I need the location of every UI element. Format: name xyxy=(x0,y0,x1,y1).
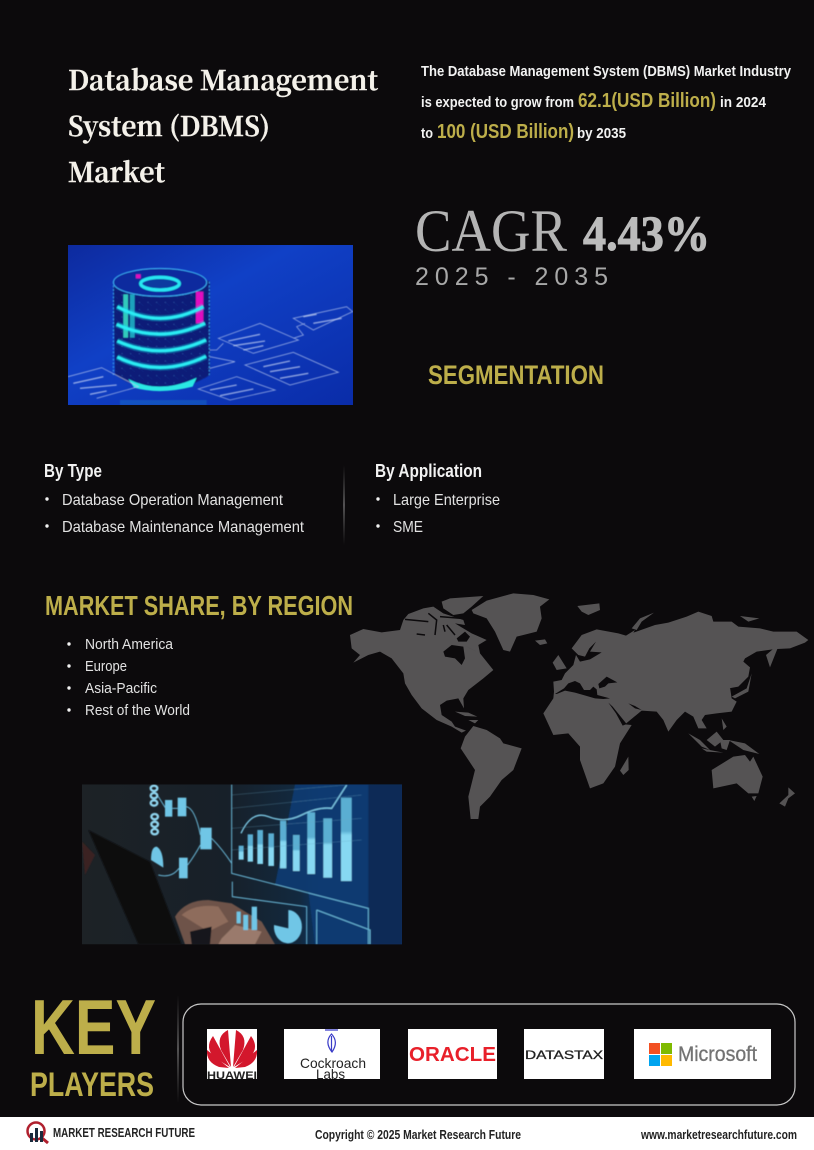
segment list: by application: By Application xyxy=(375,461,482,481)
region list: North America xyxy=(85,636,174,653)
market growth summary: to xyxy=(421,125,433,142)
logo: Huawei xyxy=(207,1029,257,1082)
market growth summary: in 2024 xyxy=(720,94,767,111)
title: System (DBMS) xyxy=(68,105,270,144)
segment list: by type: By Type xyxy=(44,461,102,481)
key players heading xyxy=(30,983,156,1104)
logo: Oracle: ORACLE xyxy=(409,1044,496,1066)
segment list: by type xyxy=(44,461,305,536)
title: Market xyxy=(68,151,165,190)
logo: Microsoft: Microsoft xyxy=(678,1043,757,1066)
logo: DataStax: DATASTAX xyxy=(525,1048,603,1062)
logo: Cockroach Labs: Cockroach xyxy=(300,1055,366,1071)
CAGR callout: 2025 - 2035 xyxy=(415,263,608,291)
market growth summary: by 2035 xyxy=(577,125,626,142)
key players heading: KEY xyxy=(31,983,156,1071)
title xyxy=(68,59,378,190)
footer xyxy=(0,1117,814,1150)
market growth summary: 100 (USD Billion) xyxy=(437,121,574,143)
segment list: by application: Large Enterprise xyxy=(393,492,500,509)
CAGR callout: 4.43% xyxy=(583,205,710,261)
region list xyxy=(67,636,190,719)
CAGR callout xyxy=(415,198,710,291)
logo: Cockroach Labs: Labs xyxy=(316,1066,345,1082)
segmentation heading: SEGMENTATION xyxy=(428,360,604,390)
key players panel xyxy=(183,1004,795,1105)
key players heading: PLAYERS xyxy=(30,1066,154,1104)
market share heading: MARKET SHARE, BY REGION xyxy=(45,590,353,621)
segment list: by application xyxy=(375,461,500,536)
image: glowing database cylinder xyxy=(68,245,353,405)
copyright: Copyright © 2025 Market Research Future xyxy=(315,1128,521,1142)
region list: Asia-Pacific xyxy=(85,680,157,697)
market growth summary: 62.1(USD Billion) xyxy=(578,90,716,112)
market growth summary: is expected to grow from xyxy=(421,94,574,111)
market growth summary xyxy=(421,63,792,143)
logo: Oracle xyxy=(408,1029,497,1079)
footer brand name: MARKET RESEARCH FUTURE xyxy=(53,1126,195,1140)
icon: Market Research Future logo xyxy=(28,1122,48,1143)
logo: Huawei: HUAWEI xyxy=(207,1070,257,1082)
title: Database Management xyxy=(68,59,378,98)
segment list: by type: Database Maintenance Management xyxy=(62,519,305,536)
segment list: by type: Database Operation Management xyxy=(62,492,284,509)
CAGR callout: CAGR xyxy=(415,198,567,264)
image: analytics dashboard over laptop xyxy=(82,784,402,944)
world map xyxy=(350,593,808,819)
region list: Rest of the World xyxy=(85,702,190,719)
logo: DataStax xyxy=(524,1029,604,1079)
logo: Microsoft xyxy=(634,1029,771,1079)
segment list: by application: SME xyxy=(393,519,423,536)
logo: Cockroach Labs xyxy=(284,1029,380,1082)
region list: Europe xyxy=(85,658,127,675)
